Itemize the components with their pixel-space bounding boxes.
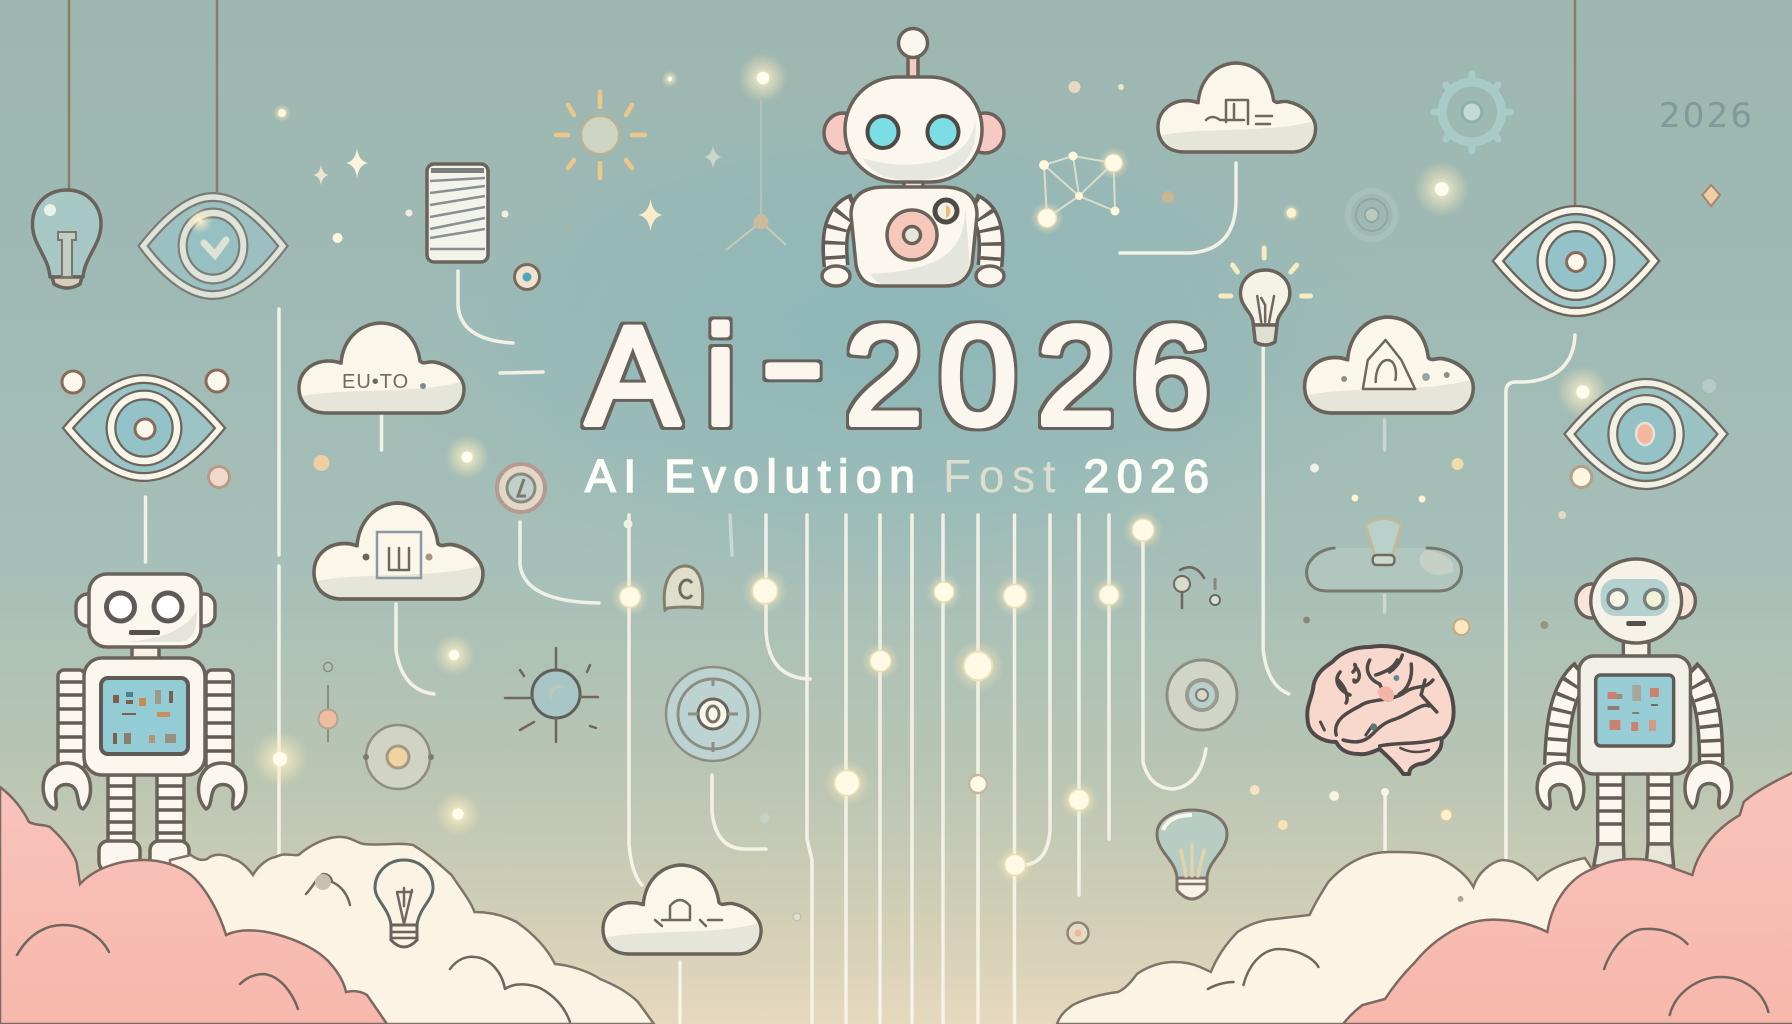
key icon: [1174, 567, 1220, 608]
teal glow behind title: [376, 80, 1416, 600]
cream cloud right: [1057, 852, 1693, 1024]
circuit lines: [146, 163, 1236, 1024]
head: [89, 574, 201, 647]
title: [586, 282, 1210, 454]
C badge: [664, 566, 703, 610]
body with screen: [84, 658, 205, 775]
bulb in cream cloud: [375, 860, 433, 947]
antenna: [898, 28, 928, 78]
gear icon: [1434, 74, 1511, 151]
eye left: [62, 370, 230, 488]
head: [845, 77, 982, 182]
bulb with rays: [1221, 248, 1311, 345]
arms: [822, 206, 1004, 286]
glowing nodes on circuit: [611, 510, 1163, 884]
legs: [99, 775, 189, 871]
small pin icon: [318, 662, 338, 742]
cloud right with bell: [1305, 317, 1473, 413]
ring with letter: [497, 464, 545, 512]
body: [851, 187, 977, 286]
cloud bottom center: [603, 865, 761, 954]
label 2026: 2026: [1659, 96, 1752, 136]
pink cloud right: [1343, 772, 1792, 1024]
node icon: [726, 100, 786, 250]
ears: [824, 113, 1004, 153]
hanging chains: [69, 0, 1575, 210]
cloud with chart icon: [314, 503, 483, 599]
left robot: [43, 574, 246, 871]
target icon right: [1167, 660, 1237, 730]
sun outline icon: [505, 648, 598, 742]
sun icon top: [556, 92, 645, 178]
title: Ai: [586, 297, 736, 454]
neck: [1623, 642, 1649, 658]
phone icon: [427, 164, 488, 262]
bulb top left: [32, 190, 101, 288]
faint cloud with bulb: [1307, 518, 1462, 591]
cloud top right: [1158, 63, 1316, 152]
title: -: [761, 282, 824, 438]
ring small bottom: [1068, 922, 1088, 944]
ears: [1576, 584, 1695, 618]
eye right: [1570, 383, 1723, 485]
ears: [76, 594, 215, 626]
head: [1591, 559, 1682, 643]
eye top left: [143, 197, 283, 295]
eye top right: [1498, 210, 1654, 312]
top robot: [822, 28, 1004, 286]
target icon center: [666, 667, 760, 761]
sparkles and small dots: [252, 53, 1174, 921]
brain: [1307, 646, 1454, 774]
cream cloud left: [170, 837, 654, 1024]
title: 2026: [845, 297, 1210, 454]
subtitle: AI Evolution Fost 2026: [585, 450, 1209, 502]
pink cloud left: [0, 787, 387, 1024]
legs: [1594, 772, 1674, 866]
sparkles and small dots right side: [1250, 161, 1720, 830]
bulb lower center: [1157, 810, 1227, 899]
target icon left: [363, 725, 434, 789]
ring badge small: [514, 264, 540, 290]
faint ring: [1348, 191, 1395, 239]
network constellation: [1030, 147, 1130, 235]
neck: [904, 178, 923, 190]
arms: [43, 670, 246, 809]
neck: [132, 646, 159, 660]
right robot: [1537, 559, 1732, 866]
cloud with EU TO label: EU•TO: [342, 371, 409, 393]
cloud with EU TO label: [299, 323, 464, 413]
circuit lines right side: [1263, 335, 1575, 858]
arms: [1537, 672, 1732, 809]
body with screen: [1579, 656, 1690, 774]
